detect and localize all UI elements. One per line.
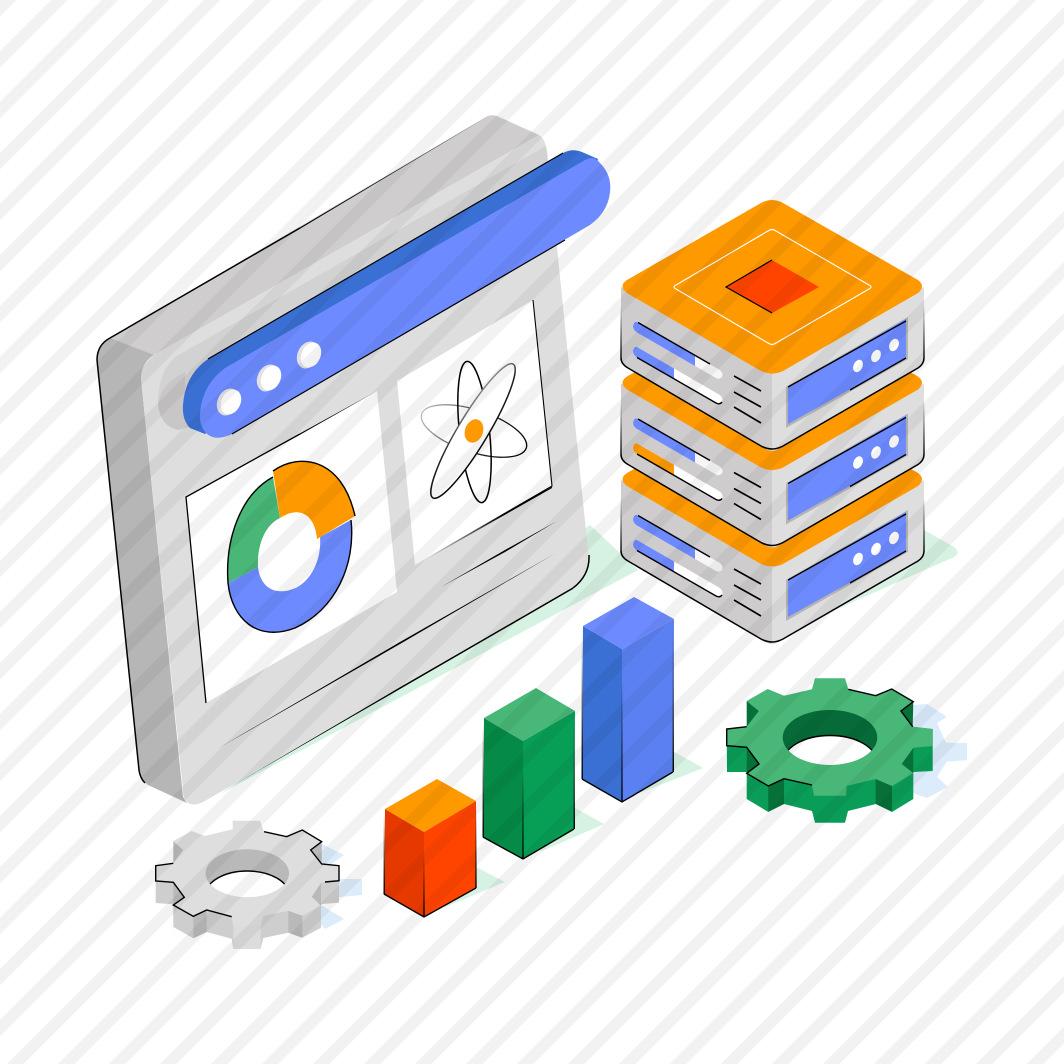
orbit: horizontal xyxy=(415,394,533,468)
donut chart xyxy=(228,461,355,632)
gear side xyxy=(727,701,933,823)
text line 2 xyxy=(217,553,556,749)
server top xyxy=(622,200,922,374)
window top edge taper xyxy=(300,115,490,229)
server top xyxy=(622,393,922,566)
nucleus xyxy=(461,417,487,445)
toolbar side xyxy=(183,150,598,434)
bar: blue xyxy=(582,597,674,802)
top red square xyxy=(726,260,819,313)
server vents xyxy=(734,472,761,520)
donut segment: orange xyxy=(273,461,355,539)
server left face xyxy=(621,287,772,451)
top inset outline xyxy=(674,230,871,344)
shadow: server stack xyxy=(780,530,958,630)
left panel top edge taper xyxy=(300,391,377,435)
gear top xyxy=(156,821,339,927)
orbit: vertical xyxy=(452,360,497,504)
gear outline xyxy=(727,689,913,786)
server outline xyxy=(620,402,925,546)
window bottom edge taper xyxy=(232,587,573,786)
server left face xyxy=(621,384,772,548)
toolbar xyxy=(183,150,610,438)
browser window xyxy=(97,115,589,804)
gear dark facets xyxy=(747,701,913,812)
window front face xyxy=(141,135,589,804)
shadow: green bar xyxy=(540,808,604,852)
orbit: diagonal xyxy=(420,356,526,506)
toolbar front xyxy=(200,158,610,438)
right panel edge xyxy=(425,300,552,560)
server unit: middle xyxy=(620,296,925,548)
top red square edge xyxy=(726,260,772,313)
server left face xyxy=(621,480,772,644)
darker toolbar shadow at left cap xyxy=(158,372,195,430)
donut segment: blue xyxy=(228,520,352,632)
server display xyxy=(786,510,908,621)
server bars xyxy=(633,418,723,500)
toolbar lines xyxy=(208,153,565,434)
server display xyxy=(786,317,908,428)
window side face xyxy=(97,336,187,803)
server right face xyxy=(772,480,924,644)
server bars xyxy=(633,322,723,404)
bar chart xyxy=(384,597,674,917)
gear side xyxy=(156,841,339,949)
server unit: top xyxy=(620,200,925,451)
server display xyxy=(786,414,908,524)
gear dark facets xyxy=(173,841,322,938)
gear shadow xyxy=(300,843,362,929)
server vents xyxy=(734,376,761,423)
toolbar dot 3 xyxy=(293,338,325,372)
text line 1 xyxy=(441,521,557,587)
gear top xyxy=(727,678,933,796)
gear hole xyxy=(206,849,289,897)
left panel edge xyxy=(186,434,300,703)
bar: green xyxy=(482,688,575,859)
window edge lines xyxy=(97,228,589,783)
gear: green xyxy=(727,678,967,823)
window top face xyxy=(110,115,539,355)
gear front tooth xyxy=(233,927,261,949)
donut outline xyxy=(228,461,355,632)
toolbar dot 2 xyxy=(253,361,285,395)
server unit: bottom xyxy=(620,393,925,644)
toolbar dot 1 xyxy=(213,385,245,419)
right content panel xyxy=(397,300,552,565)
server right face xyxy=(772,287,924,451)
atom icon xyxy=(415,356,533,506)
gear shadow xyxy=(913,704,967,798)
shadow: blue bar xyxy=(640,751,703,793)
server outline xyxy=(620,305,925,449)
server bars xyxy=(633,515,723,597)
shadow: red bar xyxy=(443,867,505,908)
left content panel xyxy=(186,391,397,703)
toolbar shadow xyxy=(158,146,552,428)
server outline xyxy=(620,498,925,642)
server right face xyxy=(772,384,924,548)
donut segment: green xyxy=(228,477,280,583)
gear: gray xyxy=(156,821,362,949)
server top xyxy=(622,296,922,470)
bar: red xyxy=(384,779,477,917)
gear hole xyxy=(782,710,878,765)
gear outline xyxy=(156,830,339,917)
shadow: window xyxy=(220,525,638,794)
server vents xyxy=(734,569,761,616)
